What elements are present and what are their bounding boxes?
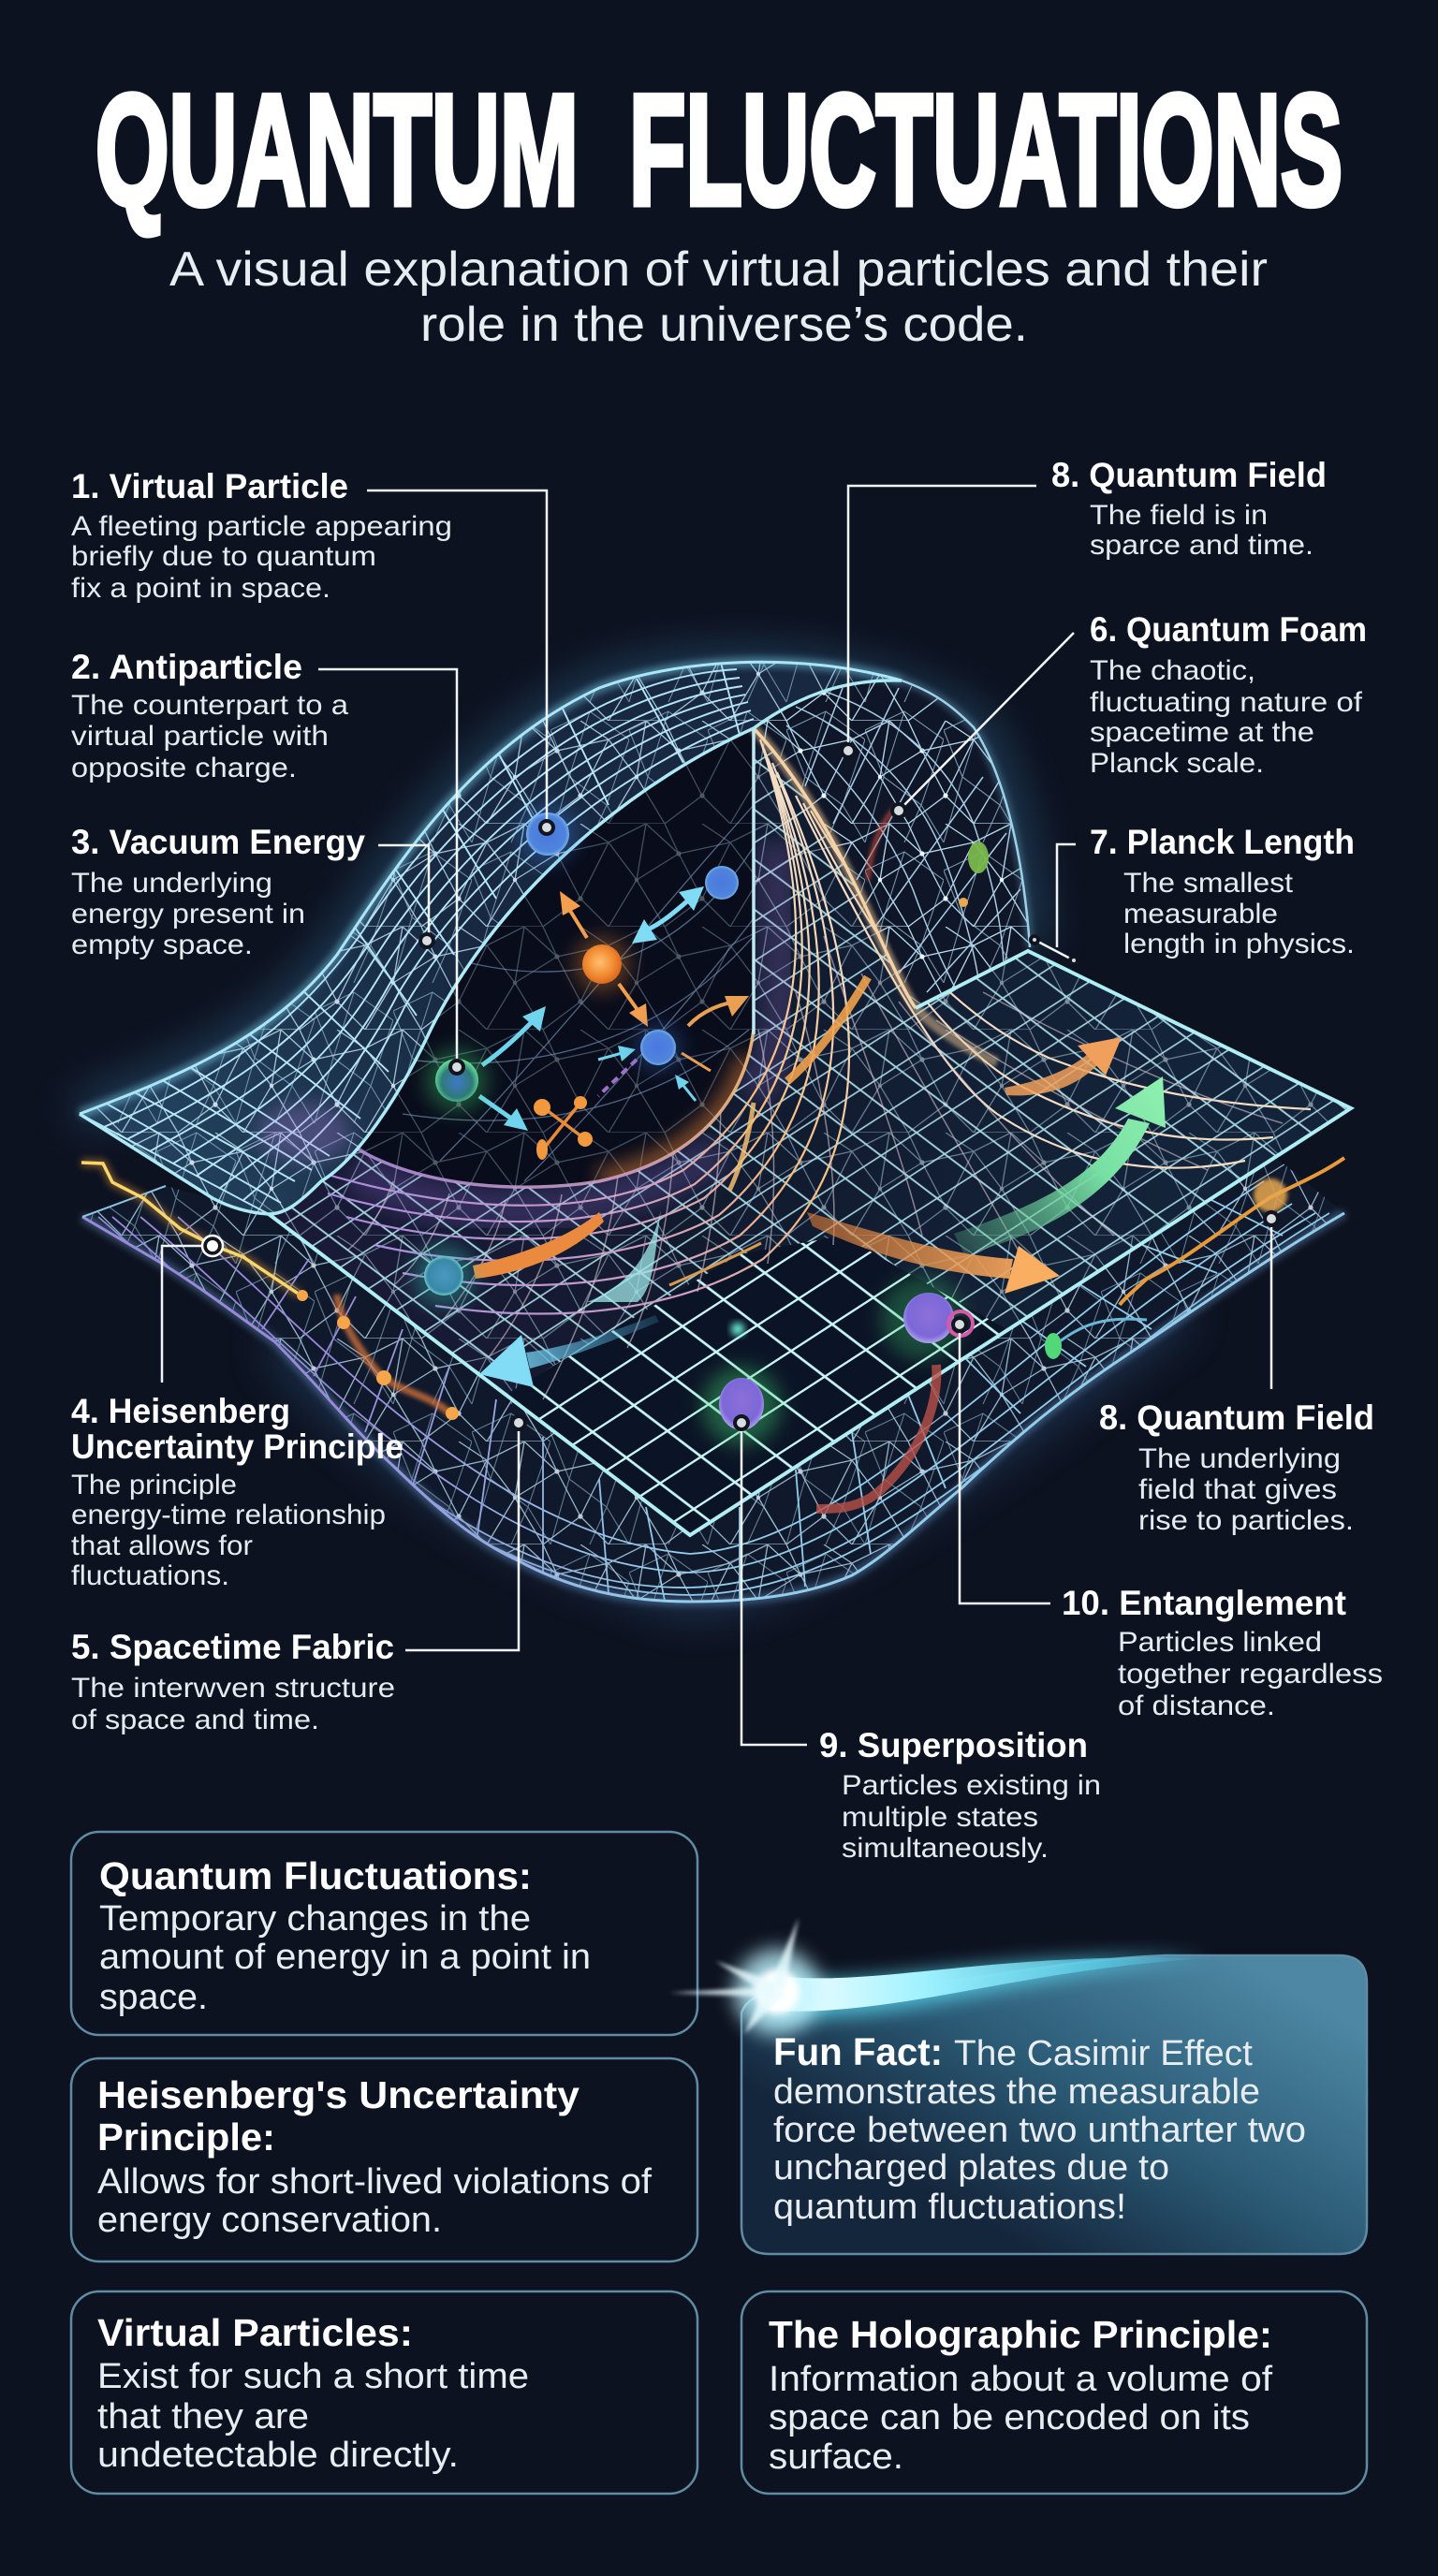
label: 8 Quantum Field top: 8. Quantum Field (1051, 456, 1327, 494)
label: 4 Heisenberg Uncertainty Principle: 4. Heisenberg (71, 1392, 290, 1430)
label: 7 Planck Length: The smallest (1123, 868, 1294, 899)
label: 6 Quantum Foam: fluctuating nature of (1090, 687, 1363, 718)
panel: Virtual Particles: that they are (97, 2397, 309, 2437)
label: 3 Vacuum Energy: The underlying (71, 868, 272, 899)
label: 6 Quantum Foam: Planck scale. (1090, 748, 1264, 779)
particle: entangled ring (948, 1311, 973, 1336)
label: 2 Antiparticle: The counterpart to a (71, 690, 348, 721)
particle: teal (412, 1244, 476, 1308)
label: 3 Vacuum Energy: energy present in (71, 899, 305, 929)
icon: cyan arrow down-right (479, 1096, 528, 1131)
panel: Quantum Fluctuations (71, 1832, 697, 2035)
arrow: large orange lower right (807, 1212, 1060, 1294)
arrow: large orange upper right (1005, 1037, 1122, 1095)
panel: The Holographic Principle (741, 2291, 1367, 2494)
title (95, 62, 1343, 238)
panel: Heisenberg's Uncertainty Principle: energy conservation. (97, 2201, 442, 2240)
panel: Fun Fact: demonstrates the measurable (773, 2072, 1260, 2112)
icon: orange arrow down-right (619, 984, 648, 1027)
particle: superposition (702, 1367, 781, 1445)
panel: Fun Fact: uncharged plates due to (773, 2148, 1169, 2188)
label: 6 Quantum Foam: 6. Quantum Foam (1090, 610, 1367, 649)
label: 6 Quantum Foam: spacetime at the (1090, 717, 1314, 748)
left ribbon of the wave (75, 646, 917, 1226)
label: 2 Antiparticle (71, 648, 348, 783)
label: 8 Quantum Field bottom: field that gives (1138, 1474, 1337, 1505)
panel: Virtual Particles: undetectable directly. (97, 2436, 459, 2475)
flare: sweep (669, 1918, 1208, 2035)
icon: cyan arrow up-right (482, 1006, 546, 1065)
label: 5 Spacetime Fabric (71, 1628, 395, 1735)
callout: 1 (367, 490, 553, 834)
callout: 7 (1031, 844, 1078, 964)
label: 4 Heisenberg Uncertainty Principle: Uncertainty Principle (71, 1427, 404, 1466)
arrow: orange from teal particle (473, 1212, 604, 1279)
particle: entangled purple (881, 1277, 963, 1359)
label: 1 Virtual Particle (71, 467, 452, 604)
panel: The Holographic Principle: The Holographic Principle: (769, 2313, 1272, 2356)
callout: 3 (378, 845, 433, 947)
label: 3 Vacuum Energy: 3. Vacuum Energy (71, 823, 365, 861)
label: 1 Virtual Particle: A fleeting particle appearing (71, 511, 452, 542)
label: 4 Heisenberg Uncertainty Principle: that allows for (71, 1530, 253, 1561)
label: 4 Heisenberg Uncertainty Principle (71, 1392, 404, 1591)
label: 5 Spacetime Fabric: The interwven structure (71, 1673, 395, 1704)
label: 4 Heisenberg Uncertainty Principle: The principle (71, 1470, 237, 1500)
callout: 4 (162, 1236, 223, 1383)
particle: green antiparticle (425, 1048, 489, 1112)
label: 3 Vacuum Energy: empty space. (71, 929, 253, 960)
callout: 10 (953, 1318, 1050, 1603)
label: 5 Spacetime Fabric: of space and time. (71, 1705, 319, 1735)
left energy streaks (81, 1163, 459, 1420)
subtitle (169, 242, 1268, 352)
label: 8 Quantum Field bottom: 8. Quantum Field (1099, 1398, 1374, 1437)
panel: Heisenberg's Uncertainty Principle (71, 2058, 697, 2261)
label: 10 Entanglement: of distance. (1118, 1690, 1275, 1721)
callout: 5 (405, 1416, 525, 1650)
label: 2 Antiparticle: opposite charge. (71, 753, 297, 783)
label: 6 Quantum Foam: The chaotic, (1090, 655, 1255, 686)
panel: Fun Fact: force between two untharter two (773, 2111, 1306, 2150)
glow behind mesh (80, 666, 1183, 1602)
label: 1 Virtual Particle: briefly due to quantum (71, 541, 376, 572)
arrow: large green (954, 1076, 1166, 1254)
icon: orange arrow up-left (560, 891, 587, 938)
panel: Heisenberg's Uncertainty Principle: Allows for short-lived violations of (97, 2162, 652, 2202)
red streak (816, 1365, 936, 1509)
panel: The Holographic Principle: surface. (769, 2437, 903, 2477)
panel: Quantum Fluctuations: space. (99, 1978, 208, 2017)
arrow: pale cyan fin (587, 1210, 761, 1302)
label: 7 Planck Length (1090, 823, 1355, 959)
panel: Fun Fact: The Casimir Effect (954, 2034, 1253, 2073)
callout lines and dots (162, 486, 1278, 1745)
label: 5 Spacetime Fabric: 5. Spacetime Fabric (71, 1628, 394, 1666)
label: 9 Superposition: Particles existing in (842, 1770, 1101, 1801)
label: 7 Planck Length: measurable (1123, 899, 1278, 929)
label: 9 Superposition (819, 1726, 1101, 1864)
panel: Quantum Fluctuations: Temporary changes in the (99, 1899, 531, 1939)
panel: The Holographic Principle: Information about a volume of (769, 2360, 1272, 2399)
icon: orange curved arrow (688, 996, 749, 1026)
central diagram: warped spacetime mesh (75, 646, 1357, 1610)
label: 7 Planck Length: 7. Planck Length (1090, 823, 1355, 861)
label: 2 Antiparticle: virtual particle with (71, 721, 329, 752)
label: 7 Planck Length: length in physics. (1123, 929, 1355, 959)
particle: virtual particle (518, 804, 578, 864)
label: 8 Quantum Field top: sparce and time. (1090, 530, 1313, 561)
label: 9 Superposition: 9. Superposition (819, 1726, 1088, 1764)
label: 4 Heisenberg Uncertainty Principle: fluctuations. (71, 1560, 229, 1591)
label: 1 Virtual Particle: fix a point in space. (71, 573, 330, 604)
label: 6 Quantum Foam (1090, 610, 1367, 779)
panel: Quantum Fluctuations: amount of energy in a point in (99, 1938, 591, 1977)
label: 2 Antiparticle: 2. Antiparticle (71, 648, 302, 686)
back dome mesh (761, 676, 1035, 1003)
callout: 8 top (842, 486, 1036, 757)
panel: Fun Fact (669, 1918, 1367, 2254)
label: 9 Superposition: multiple states (842, 1802, 1038, 1833)
icon: small arrows (598, 1046, 711, 1101)
label: 10 Entanglement: Particles linked (1118, 1627, 1322, 1658)
spark (731, 1323, 744, 1336)
main fabric sheet (262, 721, 1357, 1544)
label: 3 Vacuum Energy (71, 823, 365, 960)
right energy streaks (1045, 1158, 1344, 1359)
icon: cyan two-way arrow (632, 886, 704, 944)
title: QUANTUM (95, 62, 579, 238)
label: 8 Quantum Field bottom (1099, 1398, 1374, 1536)
particle: orange (574, 936, 630, 992)
subtitle: role in the universe’s code. (420, 298, 1028, 352)
panel: Heisenberg's Uncertainty Principle: Heisenberg's Uncertainty (97, 2073, 580, 2116)
label: 8 Quantum Field bottom: rise to particles. (1138, 1505, 1354, 1536)
panel: Virtual Particles: Exist for such a short time (97, 2357, 529, 2396)
label: 4 Heisenberg Uncertainty Principle: energy-time relationship (71, 1500, 386, 1530)
callout: 8 bottom (1265, 1212, 1278, 1389)
label: 8 Quantum Field top: The field is in (1090, 500, 1268, 531)
label: 10 Entanglement: together regardless (1118, 1659, 1383, 1690)
label: 8 Quantum Field bottom: The underlying (1138, 1443, 1341, 1474)
label: 10 Entanglement (1062, 1584, 1383, 1721)
panel: Fun Fact: quantum fluctuations! (773, 2188, 1126, 2227)
label: 9 Superposition: simultaneously. (842, 1833, 1049, 1864)
panel: Virtual Particles (71, 2291, 697, 2494)
panel: Virtual Particles: Virtual Particles: (97, 2311, 413, 2354)
callout: 9 (735, 1416, 807, 1745)
callout: 2 (318, 669, 463, 1074)
panel: The Holographic Principle: space can be encoded on its (769, 2398, 1250, 2437)
panel: Quantum Fluctuations: Quantum Fluctuations: (99, 1854, 532, 1897)
label: 10 Entanglement: 10. Entanglement (1062, 1584, 1346, 1622)
lower bowl mesh (75, 1142, 1357, 1610)
inner cavity (360, 740, 753, 1185)
panel: Heisenberg's Uncertainty Principle: Principle: (97, 2115, 275, 2159)
particle: central blue (634, 1023, 682, 1072)
panel: Fun Fact: Fun Fact: (773, 2030, 943, 2073)
label: 8 Quantum Field top (1051, 456, 1327, 561)
particle: upper purple (705, 866, 739, 900)
arrow: large cyan down-left (479, 1315, 659, 1387)
icon: orange molecule (534, 1060, 637, 1160)
subtitle: A visual explanation of virtual particles and their (169, 242, 1268, 297)
callout: 6 (892, 633, 1074, 817)
label: 1 Virtual Particle: 1. Virtual Particle (71, 467, 348, 505)
